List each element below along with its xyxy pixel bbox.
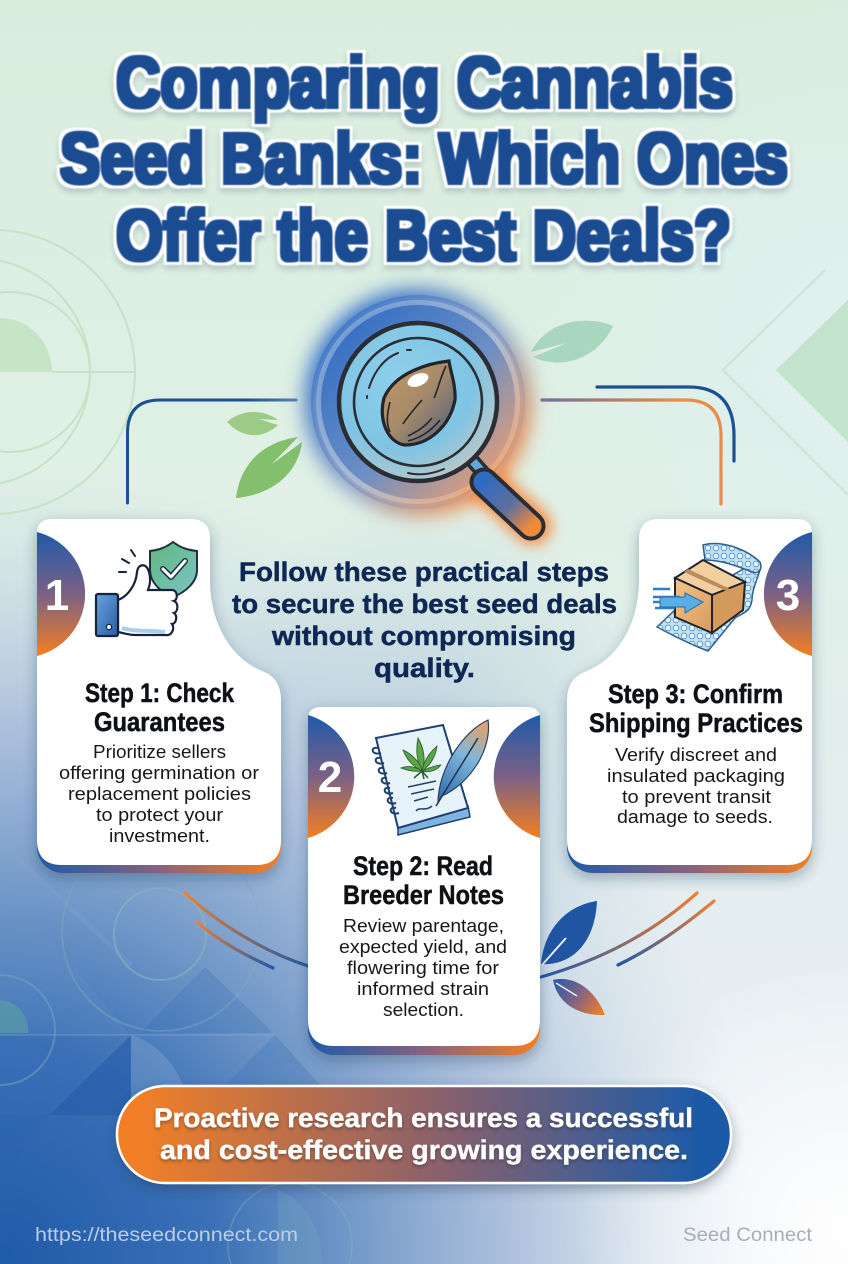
step 2 description: informed strain: [357, 979, 489, 999]
step 3 heading: Step 3: Confirm: [608, 679, 783, 709]
center intro text: to secure the best seed deals: [232, 589, 617, 619]
step 2 number badge: [308, 715, 354, 838]
panel: step 3: [567, 519, 812, 873]
icon: notebook and quill: [373, 720, 489, 835]
center intro text: Follow these practical steps: [239, 557, 609, 587]
step 2 description: [339, 916, 507, 1020]
step 2 heading: [343, 851, 504, 910]
step 2 heading: Step 2: Read: [353, 851, 493, 881]
step 1 description: Prioritize sellers: [93, 742, 226, 762]
step 2 right badge: [494, 715, 540, 838]
step 1 card shape: [37, 519, 281, 873]
callout text: and cost-effective growing experience.: [160, 1135, 688, 1165]
step 1 number badge: [37, 532, 85, 656]
title: Offer the Best Deals?: [116, 197, 731, 276]
green leaves left of magnifier: [227, 412, 302, 498]
step 1 heading: Guarantees: [94, 707, 225, 737]
step 2 description: expected yield, and: [339, 937, 507, 957]
step 3 description: [607, 745, 785, 827]
callout text: Proactive research ensures a successful: [154, 1103, 693, 1133]
step 1 description: to protect your: [96, 805, 223, 825]
cannabis leaf: [401, 738, 441, 779]
step 3 heading: [589, 679, 803, 738]
panel: step 2: [308, 707, 540, 1055]
step 2 description: Review parentage,: [343, 916, 504, 936]
step 2 description: selection.: [383, 1000, 464, 1020]
connector lines: bottom right: [541, 893, 714, 977]
panel: step 1: [37, 519, 281, 873]
step 3 number badge: [764, 532, 812, 656]
center intro text: [232, 557, 617, 683]
step 1 heading: [85, 678, 235, 737]
step 2 card shape: [308, 707, 540, 1055]
callout text: [154, 1103, 693, 1165]
step 2 number badge: 2: [318, 753, 342, 802]
step 2 description: flowering time for: [347, 958, 499, 978]
step 3 description: insulated packaging: [607, 766, 785, 786]
step 1 description: offering germination or: [59, 763, 259, 783]
icon: magnifying glass with seed: [305, 289, 538, 526]
step 3 heading: Shipping Practices: [589, 708, 803, 738]
step 2 heading: Breeder Notes: [343, 880, 504, 910]
callout banner: [117, 1086, 731, 1183]
footer url: https://theseedconnect.com: [35, 1225, 298, 1246]
step 1 description: [59, 742, 259, 846]
step 1 description: replacement policies: [68, 784, 251, 804]
step 3 number badge: 3: [776, 571, 800, 620]
center intro text: without compromising: [271, 621, 576, 651]
center intro text: quality.: [374, 653, 475, 683]
step 1 heading: Step 1: Check: [85, 678, 235, 708]
step 3 description: to prevent transit: [622, 787, 771, 807]
decorative geometric shapes: top right chevron: [723, 270, 848, 495]
title: [60, 44, 788, 276]
connector lines: bottom left: [185, 893, 308, 968]
decorative geometric shapes: bottom left facets: [0, 833, 352, 1264]
connector lines: top left: [128, 400, 296, 503]
step 3 card shape: [567, 519, 812, 873]
footer brand: Seed Connect: [683, 1225, 813, 1246]
step 3 description: Verify discreet and: [615, 745, 777, 765]
title: Comparing Cannabis: [116, 44, 733, 123]
step 3 description: damage to seeds.: [617, 807, 773, 827]
step 1 description: investment.: [109, 826, 210, 846]
icon: parcel on bubble wrap: [653, 544, 761, 651]
icon: thumbs up with shield: [96, 542, 197, 636]
step 1 number badge: 1: [45, 571, 69, 620]
blue and orange leaves by step 2: [541, 901, 605, 1015]
decorative geometric shapes: top left circles: [0, 230, 135, 514]
pale leaf right of magnifier: [531, 321, 613, 363]
connector lines: top right: [542, 387, 734, 504]
